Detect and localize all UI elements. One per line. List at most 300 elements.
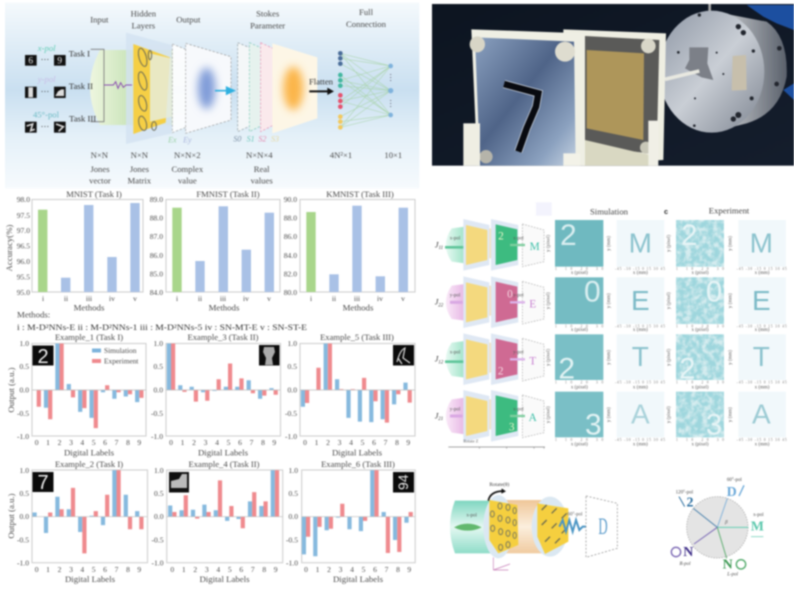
heatmaps: simulation digits — [555, 219, 603, 442]
hidden layer metasurface — [126, 33, 172, 144]
chart: Example_6: 4 — [350, 565, 354, 574]
axis labels — [571, 271, 770, 448]
column dimensions: N×N×4 — [246, 150, 273, 160]
heatmaps: experiment letters: E — [752, 285, 771, 316]
chart: Example_2: 5 — [92, 565, 96, 574]
chart: Example_2: 2 — [58, 565, 62, 574]
methods legend: Methods: — [17, 310, 50, 320]
row: J12: y-pol — [513, 351, 524, 356]
chart: FMNIST accuracy: iv — [243, 294, 249, 303]
input tasks: x-pol — [37, 43, 56, 53]
chart: MNIST accuracy: ii — [64, 294, 68, 303]
x tick values: -45 -30 -15 0 15 30 45 — [615, 267, 665, 271]
chart: Example_1: 6 — [103, 438, 107, 447]
chart: Example_3: 1 — [181, 438, 185, 447]
heatmaps: simulation letters — [617, 220, 664, 437]
chart: Example_1: 2 — [58, 438, 62, 447]
chart: Example_6: 2 — [327, 565, 331, 574]
chart: Example_6: 6 — [373, 565, 377, 574]
row: J12: 12 — [438, 360, 444, 365]
input tasks: ··· — [41, 121, 49, 131]
chart: Example_4: 1 — [182, 565, 186, 574]
x tick values: -45 -30 -15 0 15 30 45 — [737, 381, 787, 385]
thumbnail: shoe — [169, 472, 189, 492]
propagation distance axis: Rotate Z — [463, 438, 479, 443]
chart: Example_3: 2 — [192, 438, 196, 447]
chart: Example_3: 6 — [238, 438, 242, 447]
chart: Example_1: 3 — [69, 438, 73, 447]
column headings — [90, 7, 387, 30]
row: J11: M — [530, 241, 540, 253]
metasurface disk 2 — [532, 497, 568, 557]
row: J11: J — [435, 240, 438, 249]
row: J11: x-pol — [513, 236, 524, 241]
column dimensions: Jones — [130, 164, 150, 174]
chart: Example_2 — [6, 459, 148, 584]
column headings: Hidden — [131, 8, 157, 18]
heatmaps: simulation letters: M — [629, 228, 652, 259]
heatmaps: simulation letters: T — [632, 341, 649, 372]
chart: KMNIST accuracy: 86.0 — [284, 232, 297, 241]
chart: Example_5: 9 — [406, 438, 410, 447]
heatmaps: simulation letters: E — [631, 285, 650, 316]
panel: experimental setup photo — [432, 4, 794, 166]
chart: FMNIST accuracy: 86.0 — [150, 251, 163, 260]
x tick values: -45 -30 -15 0 15 30 45 — [737, 267, 787, 271]
chart: KMNIST accuracy: 88.0 — [284, 214, 297, 222]
chart: FMNIST accuracy: 85.0 — [150, 270, 163, 278]
chart: Example_4: 4 — [216, 565, 220, 574]
chart: Example_1: 0.5 — [20, 362, 29, 371]
heatmaps: experiment letters: T — [753, 341, 770, 372]
chart: Example_6: Example_6 (Task III) — [321, 459, 395, 469]
chart: MNIST accuracy: 97.0 — [17, 226, 30, 235]
chart: Example_3 — [151, 332, 280, 458]
chart: Example_3: 7 — [250, 438, 254, 447]
legend — [92, 346, 139, 366]
flatten arrow — [309, 76, 334, 95]
heatmaps: experiment digits: 2 — [679, 353, 695, 386]
chart: Example_6: 5 — [362, 565, 366, 574]
chart: FMNIST accuracy: i — [176, 294, 178, 303]
y axis labels: y (pixel) — [667, 234, 672, 252]
chart: Example_4: 2 — [193, 565, 197, 574]
x tick values: 1 10 20 30 — [555, 324, 604, 328]
fully connected layer — [338, 51, 393, 130]
y axis labels: y (mm) — [729, 293, 734, 308]
rotate arrow: Rotate(θ) — [489, 481, 510, 488]
output planes: Ey — [182, 136, 192, 145]
chart: MNIST accuracy: 95.0 — [17, 288, 30, 297]
chart: Example_5: Example_5 (Task III) — [320, 332, 394, 342]
coordinate axes — [493, 557, 510, 570]
chart: Example_5: 5 — [361, 438, 365, 447]
chart: Example_3: 0.5 — [154, 362, 163, 371]
chart: MNIST accuracy: i — [42, 294, 44, 303]
panel: polarization circle — [671, 478, 764, 578]
y axis labels: y (pixel) — [546, 348, 551, 366]
chart: Example_4: 5 — [228, 565, 232, 574]
output plane with letter D: D — [598, 514, 608, 540]
chart: KMNIST accuracy: i — [310, 294, 312, 303]
chart: Example_1: 5 — [92, 438, 96, 447]
rotate arrow — [488, 481, 510, 501]
chart: FMNIST accuracy: 88.0 — [150, 214, 163, 222]
chart: Example_5: 1.0 — [288, 339, 297, 348]
x tick values: -45 -30 -15 0 15 30 45 — [615, 324, 665, 328]
thumbnail: rotated characters: 94 — [395, 474, 411, 490]
label: N R-pol — [671, 545, 693, 567]
chart: Example_2: 6 — [103, 565, 107, 574]
chart: FMNIST accuracy: 87.0 — [150, 232, 163, 241]
thumbnail: digit 7: 7 — [37, 472, 49, 494]
column dimensions: N×N — [91, 150, 109, 160]
chart: KMNIST accuracy: iii — [354, 294, 360, 303]
legend: Simulation — [104, 346, 137, 355]
chart: Example_5: 3 — [338, 438, 342, 447]
y axis labels: y (mm) — [729, 236, 734, 251]
chart: KMNIST accuracy: iv — [377, 294, 383, 303]
chart: Example_5: 0.0 — [288, 386, 297, 394]
chart: Example_3: 5 — [227, 438, 231, 447]
thumbnail: character — [393, 345, 414, 366]
input tasks: Task II — [69, 81, 93, 91]
label: M x-pol: M — [751, 520, 764, 535]
column dimensions: Jones — [90, 164, 110, 174]
chart: Example_6: -1.0 — [286, 558, 298, 568]
heatmaps: experiment letters: M — [750, 228, 773, 259]
row: J11: 11 — [438, 246, 443, 251]
chart: Example_5: -0.5 — [285, 409, 297, 418]
headings: Simulation — [590, 206, 629, 216]
chart: Example_4: 6 — [239, 565, 243, 574]
heatmaps: experiment letters — [738, 220, 786, 437]
chart: Example_3: 9 — [272, 438, 276, 447]
panel: simulation and experiment results — [435, 202, 787, 449]
x-pol wave: x-pol — [466, 514, 478, 519]
chart: Example_3: 4 — [215, 438, 219, 447]
heatmaps: experiment digits: 0 — [706, 276, 722, 309]
axis labels: x (pixel) — [571, 271, 588, 276]
photo: mirror plate with digit 7 — [463, 29, 585, 166]
Stokes parameter planes: S2 — [258, 135, 266, 144]
chart: Example_3: 8 — [261, 438, 265, 447]
column dimensions: N×N×2 — [174, 150, 201, 160]
input tasks: 9 — [57, 57, 62, 67]
y axis labels: y (pixel) — [667, 292, 672, 309]
axis labels: x (mm) — [755, 271, 770, 276]
chart: Example_2: Example_2 (Task I) — [55, 459, 123, 469]
Stokes parameter planes: S1 — [247, 135, 255, 144]
chart: Example_2: 9 — [137, 565, 141, 574]
x tick values: 1 10 20 30 — [676, 324, 724, 328]
chart: Example_3: 3 — [204, 438, 208, 447]
row: J12: 2 — [498, 365, 504, 377]
label: N R-pol: N — [683, 545, 693, 560]
chart: Example_3: 0.0 — [154, 386, 163, 394]
arrow: output to Stokes — [215, 87, 234, 94]
row: J21: J — [435, 411, 438, 420]
heatmaps: simulation digits: 2 — [560, 219, 577, 252]
column headings: Output — [176, 14, 201, 24]
chart: Example_5 — [285, 332, 415, 458]
input tasks: 45°-pol — [33, 109, 60, 119]
y axis labels: y (mm) — [607, 293, 612, 308]
chart: MNIST accuracy: iii — [86, 294, 92, 303]
axis labels: x (mm) — [633, 443, 648, 448]
y axis labels: y (mm) — [607, 407, 612, 422]
chart: FMNIST accuracy: 84.0 — [150, 288, 163, 297]
polarization vectors — [693, 498, 748, 558]
thumbnail: garment — [259, 345, 280, 366]
row: J21: A — [529, 412, 538, 424]
photo: metasurface holder — [563, 29, 666, 166]
input tasks: 6 — [28, 57, 33, 67]
input light beam — [90, 50, 173, 125]
label: D 60-degree: D — [727, 485, 737, 500]
row: J12: T — [529, 355, 536, 367]
x tick values — [555, 267, 787, 442]
chart: Example_4: 9 — [274, 565, 278, 574]
propagation distance axis — [448, 438, 545, 449]
60-degree polarized wave: 60°-pol — [567, 513, 583, 518]
input tasks: ··· — [41, 55, 49, 65]
y axis labels: y (pixel) — [546, 234, 551, 252]
axis labels: x (pixel) — [571, 328, 588, 333]
chart: Example_1: 1 — [46, 438, 50, 447]
axis labels: x (mm) — [633, 271, 648, 276]
headings: Experiment — [709, 206, 750, 216]
column dimensions — [89, 150, 402, 185]
chart: MNIST accuracy: 96.5 — [17, 242, 30, 250]
row: J21: 3 — [509, 421, 515, 433]
row: J12 — [435, 333, 544, 385]
x tick values: 1 10 20 30 — [555, 381, 604, 385]
Stokes parameter planes — [233, 43, 317, 144]
chart: Example_2: 3 — [69, 565, 73, 574]
chart: Example_2: -0.5 — [17, 536, 29, 544]
row: J22: E — [529, 298, 536, 310]
chart: Example_6: 0 — [304, 565, 308, 574]
chart: KMNIST accuracy: 84.0 — [284, 251, 297, 260]
chart: Example_3: Example_3 (Task II) — [188, 332, 259, 342]
chart: Example_4: -0.5 — [151, 536, 164, 544]
chart: FMNIST accuracy: ii — [198, 294, 202, 303]
axis labels: x (pixel) — [691, 385, 709, 390]
chart: Example_4: Digital Labels — [199, 574, 250, 584]
chart: Example_1: 7 — [115, 438, 119, 447]
input tasks — [25, 43, 132, 133]
chart: MNIST accuracy: Methods — [74, 302, 105, 312]
heatmaps: experiment letters: A — [752, 398, 771, 429]
chart: Example_1: -0.5 — [17, 409, 29, 418]
chart: Example_2: 4 — [80, 565, 84, 574]
input tasks: ··· — [41, 87, 49, 97]
axis labels: x (mm) — [755, 385, 770, 390]
label: D 60-degree — [727, 478, 744, 500]
column headings: Parameter — [250, 20, 285, 30]
label: 2 120-degree: 2 — [686, 496, 693, 511]
chart: KMNIST accuracy: ii — [332, 294, 336, 303]
chart: Example_6: -0.5 — [286, 536, 298, 544]
y axis labels: y (mm) — [729, 350, 734, 365]
panel: output bar charts — [6, 332, 415, 584]
row: J12: x-pol — [450, 351, 461, 356]
column headings: Full — [359, 7, 374, 17]
chart: Example_4: -1.0 — [151, 558, 164, 568]
x-pol wave — [454, 514, 482, 531]
y axis labels: y (pixel) — [546, 406, 551, 423]
60-degree polarized wave — [559, 513, 591, 532]
orange propagation beam — [505, 500, 543, 553]
chart: MNIST accuracy: v — [133, 294, 137, 303]
chart: KMNIST accuracy: v — [401, 294, 405, 303]
input tasks: Task I — [69, 48, 90, 58]
chart: Example_1: 8 — [126, 438, 130, 447]
column headings: Layers — [132, 20, 156, 30]
headings — [590, 206, 750, 216]
Stokes parameter planes: S3 — [271, 135, 279, 144]
row: J22 — [435, 276, 544, 328]
axis labels: x (pixel) — [691, 271, 709, 276]
chart: Example_5: Digital Labels — [332, 448, 383, 458]
row: J11: 2 — [498, 230, 504, 242]
y axis labels — [546, 234, 734, 423]
chart: Example_6: 7 — [385, 565, 389, 574]
axis labels: x (pixel) — [691, 443, 709, 448]
row: J22: 0 — [507, 288, 513, 300]
chart: Example_6: 1.0 — [288, 466, 298, 475]
output planes: Ex — [167, 136, 177, 145]
row: J21 — [435, 390, 544, 442]
chart: Example_2: 0.5 — [20, 489, 29, 498]
headings: c — [664, 207, 668, 216]
chart: Example_6: 8 — [396, 565, 400, 574]
chart: MNIST accuracy: MNIST (Task I) — [66, 189, 122, 199]
chart: Example_5: 1 — [315, 438, 319, 447]
chart: MNIST accuracy — [4, 189, 143, 312]
chart: Example_1: Output (a.u.) — [6, 367, 16, 413]
chart: MNIST accuracy: 96.0 — [17, 257, 30, 266]
chart: Example_2: -1.0 — [17, 558, 29, 568]
panel: rotated metasurface diagram — [450, 481, 617, 570]
chart: Example_2: 1.0 — [20, 466, 29, 475]
output plane with letter D — [586, 496, 617, 557]
chart: FMNIST accuracy: Methods — [209, 302, 240, 312]
chart: FMNIST accuracy: 89.0 — [150, 195, 163, 204]
y axis labels: y (pixel) — [667, 348, 672, 366]
axis labels: x (mm) — [633, 328, 648, 333]
chart: KMNIST accuracy — [284, 189, 415, 312]
chart: MNIST accuracy: 98.0 — [17, 195, 30, 204]
chart: Example_4: 7 — [251, 565, 255, 574]
y axis labels: y (mm) — [729, 407, 734, 422]
label: N L-pol: L-pol — [726, 573, 739, 578]
chart: Example_5: 8 — [395, 438, 399, 447]
chart: Example_6: 3 — [339, 565, 343, 574]
chart: Example_4: 1.0 — [154, 466, 164, 475]
chart: Example_5: 0 — [303, 438, 307, 447]
x tick values: -45 -30 -15 0 15 30 45 — [737, 324, 787, 328]
label: 2 120-degree: 120°-pol — [676, 490, 694, 495]
column dimensions: 4N²×1 — [330, 150, 352, 160]
chart: KMNIST accuracy: Methods — [343, 302, 374, 312]
thumbnail: digit 2: 2 — [37, 346, 49, 368]
chart: Example_1 — [6, 332, 146, 458]
chart: Example_3: -1.0 — [151, 432, 163, 441]
x tick values: 1 10 20 30 — [676, 438, 724, 442]
row: J22: J — [435, 298, 438, 307]
chart: Example_6: 1 — [316, 565, 320, 574]
axis labels: x (mm) — [633, 385, 648, 390]
output planes — [167, 43, 231, 145]
row: J22: y-pol — [450, 294, 461, 299]
chart: Example_4 — [151, 459, 283, 584]
label: N R-pol: R-pol — [678, 562, 691, 567]
row: J21: 21 — [438, 417, 443, 422]
chart: Example_5: 2 — [326, 438, 330, 447]
column headings: Connection — [346, 19, 387, 29]
column headings: Stokes — [256, 8, 280, 18]
chart: KMNIST accuracy: 90.0 — [284, 195, 297, 204]
chart: Example_5: -1.0 — [285, 432, 297, 441]
chart: Example_2: 7 — [115, 565, 119, 574]
axis labels: x (mm) — [755, 328, 770, 333]
chart: Example_4: 0.5 — [154, 489, 164, 498]
column dimensions: N×N — [131, 150, 149, 160]
y axis labels: y (pixel) — [667, 406, 672, 423]
column dimensions: Complex — [171, 164, 204, 174]
chart: Example_4: 8 — [262, 565, 266, 574]
chart: KMNIST accuracy: KMNIST (Task III) — [326, 189, 394, 199]
panel: accuracy bar charts — [4, 189, 415, 332]
row: J21: x-pol — [513, 407, 524, 412]
y axis labels: y (pixel) — [546, 292, 551, 309]
chart: KMNIST accuracy: 82.0 — [284, 270, 297, 278]
chart: Example_2: Digital Labels — [65, 574, 116, 584]
x tick values: 1 10 20 30 — [676, 381, 724, 385]
axis labels: x (mm) — [755, 443, 770, 448]
row: J22: y-pol — [513, 294, 524, 299]
metasurface disk 1 — [483, 495, 518, 558]
panel: network architecture — [5, 3, 419, 188]
heatmaps: simulation digits: 2 — [558, 353, 575, 386]
chart: MNIST accuracy: 95.5 — [17, 272, 30, 282]
column dimensions: vector — [89, 175, 111, 185]
chart: Example_3: 0 — [169, 438, 173, 447]
heatmaps: experiment digits: 3 — [706, 409, 722, 442]
chart: Example_1: Digital Labels — [64, 448, 115, 458]
chart: Example_2: 0 — [35, 565, 39, 574]
chart: Example_4: 0 — [170, 565, 174, 574]
column dimensions: value — [178, 175, 197, 185]
chart: FMNIST accuracy: iii — [220, 294, 226, 303]
chart: Example_6: Digital Labels — [333, 574, 384, 584]
photo: rod — [665, 71, 699, 79]
chart: Example_6: 0.5 — [288, 489, 298, 498]
axis labels: x (pixel) — [571, 385, 588, 390]
panel: polarization circle: β — [724, 519, 728, 525]
row: J11: x-pol — [450, 236, 461, 241]
chart: FMNIST accuracy — [150, 189, 280, 312]
chart: MNIST accuracy: Accuracy(%) — [4, 224, 14, 271]
chart: FMNIST accuracy: FMNIST (Task II) — [196, 189, 260, 199]
chart: Example_1: 9 — [137, 438, 141, 447]
row: J11 — [435, 219, 544, 271]
input tasks: Task III — [69, 113, 96, 123]
x tick values: -45 -30 -15 0 15 30 45 — [615, 438, 665, 442]
row: J22: 22 — [438, 303, 444, 308]
